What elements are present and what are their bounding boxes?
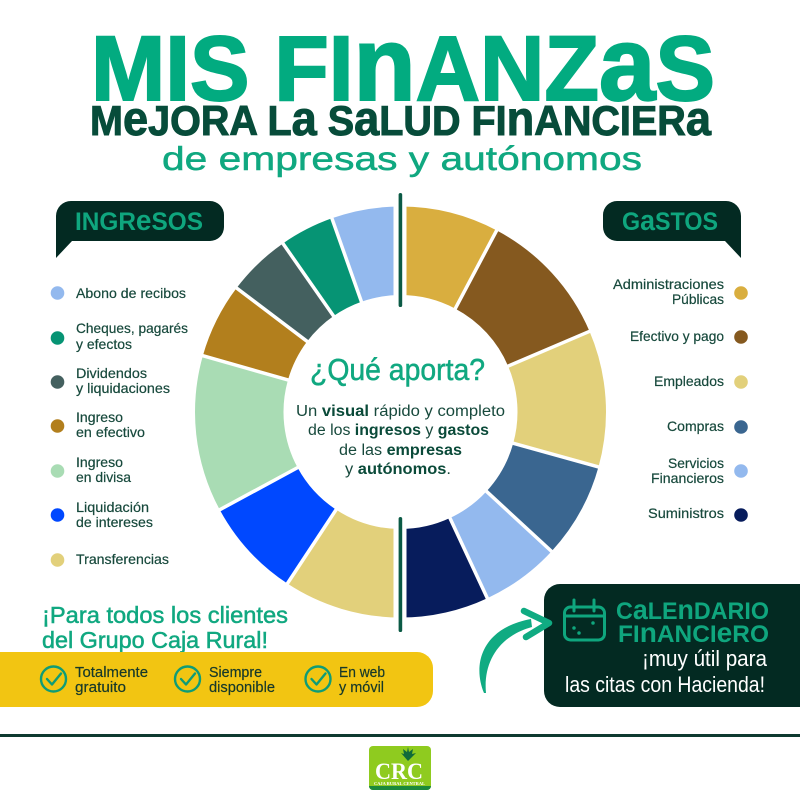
legend: gastos bbox=[613, 276, 748, 522]
heading bubble: Ingresos: INGReSOS bbox=[75, 205, 203, 237]
legend item: Ingreso en efectivo: Ingreso bbox=[76, 409, 123, 425]
title: Mis Finanzas: MIS FInANZaS bbox=[91, 6, 715, 123]
legend item: Suministros bbox=[648, 505, 748, 522]
heading bubble: Ingresos bbox=[56, 201, 224, 258]
legend item: Ingreso en divisa bbox=[51, 454, 131, 485]
legend item: Ingreso en efectivo: en efectivo bbox=[76, 424, 145, 440]
legend item: Servicios Financieros bbox=[651, 455, 748, 486]
segment: Liquidación de intereses bbox=[220, 468, 336, 584]
legend item: Compras: Compras bbox=[667, 418, 724, 434]
segment: Cheques, pagarés y efectos bbox=[283, 218, 361, 316]
legend item: Administraciones Públicas: Administraciones bbox=[613, 276, 724, 292]
benefit: en web y móvil: y móvil bbox=[339, 680, 384, 696]
segment: Dividendos y liquidaciones bbox=[237, 243, 334, 341]
heading bubble: Gastos: GaSTOS bbox=[622, 205, 718, 237]
legend item: Ingreso en efectivo bbox=[51, 409, 145, 440]
panel text: ¡muy útil para bbox=[642, 646, 768, 671]
heading bubble: Gastos bbox=[603, 201, 741, 258]
segment: Efectivo y pago bbox=[455, 230, 590, 366]
panel text bbox=[565, 646, 768, 697]
legend: ingresos bbox=[51, 285, 188, 567]
legend item: Administraciones Públicas: Públicas bbox=[672, 291, 724, 307]
benefit: en web y móvil bbox=[306, 665, 385, 696]
panel heading bbox=[616, 594, 769, 648]
legend item: Cheques, pagarés y efectos bbox=[51, 320, 188, 352]
segment: Ingreso en efectivo bbox=[203, 288, 307, 380]
logo: CRC: CAJA RURAL CENTRAL bbox=[374, 781, 425, 786]
legend item: Dividendos y liquidaciones: Dividendos bbox=[76, 365, 147, 381]
legend item: Liquidación de intereses: de intereses bbox=[76, 514, 153, 530]
segment: Ingreso en divisa bbox=[195, 356, 298, 510]
logo: CRC: CRC bbox=[375, 759, 423, 784]
benefit: en web y móvil: En web bbox=[339, 665, 385, 681]
center description: Un visual rápido y completo bbox=[296, 403, 505, 420]
legend item: Suministros: Suministros bbox=[648, 505, 724, 521]
center heading: ¿Qué aporta? bbox=[310, 352, 485, 387]
segment: Abono de recibos bbox=[332, 206, 400, 302]
callout: para todos los clientes bbox=[42, 602, 288, 653]
segment: Empleados bbox=[508, 331, 606, 467]
title block bbox=[90, 6, 715, 177]
legend item: Dividendos y liquidaciones bbox=[51, 365, 170, 396]
segment: Servicios Financieros bbox=[450, 491, 552, 598]
tagline: de empresas y autónomos: de empresas y autónomos bbox=[162, 140, 642, 177]
benefit: totalmente gratuito bbox=[41, 665, 148, 696]
legend item: Ingreso en divisa: en divisa bbox=[76, 469, 131, 485]
benefit: totalmente gratuito: Totalmente bbox=[75, 665, 148, 681]
icon: calendar bbox=[564, 600, 604, 640]
segment: Compras bbox=[486, 443, 599, 551]
legend item: Transferencias: Transferencias bbox=[76, 551, 169, 567]
legend item: Efectivo y pago: Efectivo y pago bbox=[630, 328, 724, 344]
panel text: las citas con Hacienda! bbox=[565, 672, 765, 697]
center description bbox=[296, 403, 505, 478]
callout: para todos los clientes: del Grupo Caja Rural! bbox=[42, 627, 268, 653]
panel heading: FInANCIeRO bbox=[618, 617, 769, 648]
segment: Administraciones Públicas bbox=[400, 206, 497, 309]
segment: Suministros bbox=[400, 518, 487, 618]
legend item: Dividendos y liquidaciones: y liquidaciones bbox=[76, 380, 170, 396]
subtitle: Mejora la salud financiera: MeJORA La SaLUD FInANCIERa bbox=[90, 93, 711, 146]
segment: Transferencias bbox=[287, 510, 400, 618]
callout: para todos los clientes: ¡Para todos los clientes bbox=[42, 602, 288, 628]
benefit: siempre disponible bbox=[175, 665, 275, 696]
legend item: Cheques, pagarés y efectos: y efectos bbox=[76, 336, 132, 352]
legend item: Empleados: Empleados bbox=[654, 373, 724, 389]
benefit: totalmente gratuito: gratuito bbox=[75, 680, 126, 696]
donut chart bbox=[195, 193, 606, 632]
legend item: Liquidación de intereses: Liquidación bbox=[76, 499, 149, 515]
center description: y autónomos . bbox=[345, 461, 451, 478]
arrow bbox=[479, 611, 549, 693]
legend item: Servicios Financieros: Servicios bbox=[668, 455, 724, 471]
legend item: Administraciones Públicas bbox=[613, 276, 748, 307]
legend item: Ingreso en divisa: Ingreso bbox=[76, 454, 123, 470]
legend item: Abono de recibos: Abono de recibos bbox=[76, 285, 186, 301]
legend item: Cheques, pagarés y efectos: Cheques, pagarés bbox=[76, 320, 188, 336]
logo: CRC bbox=[369, 746, 431, 790]
center description: de las empresas bbox=[339, 442, 462, 459]
panel heading: CaLEnDARIO bbox=[616, 594, 769, 625]
legend item: Servicios Financieros: Financieros bbox=[651, 470, 724, 486]
legend item: Liquidación de intereses bbox=[51, 499, 153, 530]
center description: de los ingresos y gastos bbox=[308, 422, 489, 439]
benefit: siempre disponible: disponible bbox=[209, 680, 275, 696]
center text bbox=[296, 352, 505, 478]
panel: calendario financiero bbox=[544, 584, 800, 707]
benefit: siempre disponible: Siempre bbox=[209, 665, 262, 681]
panel: benefits bar bbox=[0, 652, 433, 707]
